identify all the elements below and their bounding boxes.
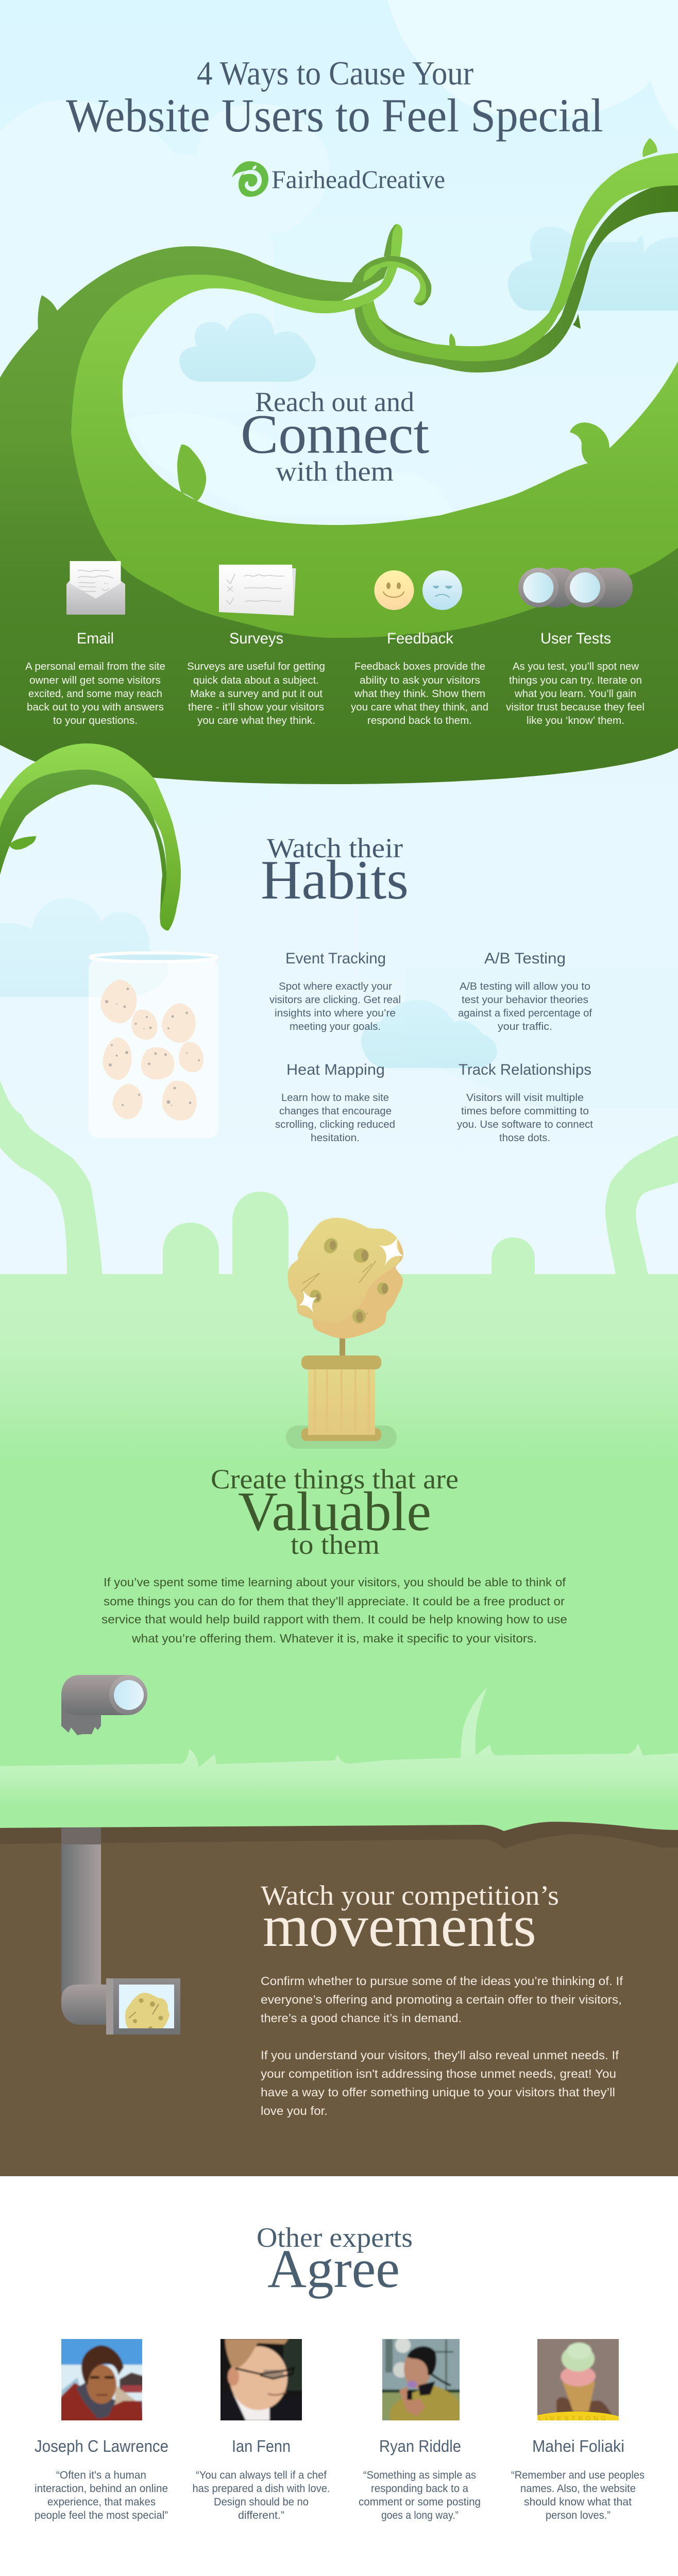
beanstalk: ring knot	[352, 256, 431, 306]
heading: Other experts Agree: Other experts	[257, 2222, 413, 2253]
description: you care what they think, and	[351, 701, 488, 713]
description: back out to you with answers	[27, 701, 164, 713]
description: things you can try. Iterate on	[509, 674, 642, 686]
text: Track Relationships: you. Use software to connect	[457, 1118, 593, 1130]
paragraph: create value: some things you can do for them that they’ll appreciate. It could be a free product or	[104, 1595, 565, 1608]
pale background clouds	[0, 0, 678, 1108]
description: to your questions.	[53, 715, 138, 726]
heading: Reach out and Connect with them: with them	[276, 456, 394, 487]
leaf: top of right stem	[642, 138, 657, 157]
expert: Joseph C Lawrence: “Often it's a human	[56, 2469, 146, 2481]
description: you care what they think.	[197, 715, 315, 726]
expert: Joseph C Lawrence: people feel the most special”	[35, 2510, 168, 2521]
text: A/B Testing: A/B testing will allow you to	[460, 980, 590, 992]
column: User Tests	[506, 568, 645, 726]
text: Heat Mapping: Heat Mapping	[286, 1061, 385, 1078]
column: Feedback	[351, 570, 488, 726]
label: Surveys	[229, 630, 283, 647]
expert: Ryan Riddle: comment or some posting	[359, 2496, 481, 2508]
icon: swirl	[232, 161, 268, 197]
pedestal shadow	[286, 1426, 397, 1449]
expert: Mahei Foliaki: “Remember and use peoples	[511, 2469, 645, 2481]
pedestal capital	[301, 1355, 381, 1369]
text: Event Tracking: visitors are clicking. Get real	[269, 994, 401, 1006]
heading: Create things that are Valuable to them	[211, 1464, 459, 1560]
description: excited, and some may reach	[28, 688, 162, 700]
heading: Reach out and Connect with them	[241, 386, 429, 487]
text: Heat Mapping: Learn how to make site	[281, 1092, 389, 1104]
expert: Mahei Foliaki: should know what that	[524, 2496, 632, 2508]
pedestal column	[308, 1369, 375, 1435]
heading: Watch their Habits: Habits	[261, 850, 409, 911]
expert: Ryan Riddle: responding back to a	[371, 2483, 468, 2495]
paragraphs: competition: Confirm whether to pursue some of the ideas you’re thinking of. If	[261, 1974, 623, 1988]
expert: Joseph C Lawrence: experience, that makes	[47, 2496, 156, 2508]
text: Event Tracking: Event Tracking	[285, 950, 386, 967]
panel: white experts section	[0, 2176, 678, 2576]
photo: Ryan Riddle	[382, 2339, 460, 2420]
potato chips	[308, 1236, 388, 1324]
sparkle large	[372, 1230, 411, 1272]
leaf	[9, 836, 36, 850]
text: Event Tracking: insights into where you’re	[275, 1007, 396, 1019]
leaf: inner left	[177, 445, 206, 501]
beanstalk: dark mass	[0, 246, 678, 784]
periscope above ground	[61, 1675, 147, 1735]
heading: Other experts Agree	[257, 2222, 413, 2299]
bean speckles	[105, 988, 200, 1106]
cloud: centre under the vine	[179, 313, 316, 382]
expert: Ryan Riddle: Ryan Riddle	[379, 2437, 461, 2455]
stem	[340, 1337, 345, 1357]
photo: Ian Fenn	[221, 2339, 302, 2420]
description: there - it’ll show your visitors	[188, 701, 324, 713]
cloud: behind the jar	[0, 898, 168, 997]
text: A/B Testing: against a fixed percentage of	[458, 1007, 592, 1019]
golden potato trophy	[286, 1218, 411, 1449]
text: Heat Mapping: changes that encourage	[279, 1105, 392, 1117]
expert: Ryan Riddle: goes a long way.”	[381, 2510, 459, 2521]
expert: Joseph C Lawrence: Joseph C Lawrence	[35, 2437, 168, 2455]
underground pipe and viewing frame	[61, 1827, 180, 2035]
paragraph: create value: what you’re offering them. Whatever it is, make it specific to your visitors.	[131, 1632, 537, 1645]
small potato on screen	[125, 1993, 170, 2028]
column: Surveys	[187, 565, 325, 726]
label: User Tests	[540, 630, 611, 647]
expert: Mahei Foliaki	[511, 2437, 645, 2521]
paragraphs: competition: have a way to offer something unique to your visitors that they’ll	[261, 2086, 615, 2099]
beanstalk: dark tip stripe	[384, 224, 398, 257]
description: what they think. Show them	[354, 688, 485, 700]
jar rim	[90, 953, 217, 961]
text: Track Relationships: Visitors will visit multiple	[466, 1092, 584, 1104]
description: respond back to them.	[367, 715, 472, 726]
paragraphs: competition: your competition isn't addressing those unmet needs, great! You	[261, 2067, 616, 2080]
cloud: right of the vine	[508, 227, 678, 311]
description: Feedback boxes provide the	[354, 660, 485, 672]
text: A/B Testing: A/B Testing	[484, 950, 566, 967]
leaf: on the lower curve	[449, 333, 455, 346]
text: Track Relationships: those dots.	[499, 1132, 550, 1144]
screen	[119, 1985, 174, 2028]
leaf: dark under the right stem	[573, 314, 581, 329]
heading: Other experts Agree: Agree	[267, 2239, 400, 2299]
column: Email	[25, 561, 165, 726]
sparkle small	[293, 1285, 323, 1317]
cloud: behind the Habits text	[361, 1000, 497, 1068]
paragraphs: competition: there’s a good chance it’s in demand.	[261, 2011, 462, 2025]
beanstalk: light mass	[71, 224, 678, 638]
icon: envelope	[66, 561, 125, 615]
description: As you test, you’ll spot new	[513, 660, 639, 672]
expert: Mahei Foliaki: names. Also, the website	[520, 2483, 636, 2495]
potato body	[288, 1218, 403, 1338]
description: Surveys are useful for getting	[187, 660, 325, 672]
title	[66, 55, 603, 142]
text: Track Relationships	[457, 1061, 593, 1144]
description: quick data about a subject.	[193, 674, 319, 686]
label: Email	[77, 630, 114, 647]
title: Website Users to Feel Special	[66, 89, 603, 142]
paragraphs: competition: love you for.	[261, 2104, 328, 2117]
description	[187, 660, 325, 726]
expert: Ian Fenn: “You can always tell if a chef	[196, 2469, 327, 2481]
text: Event Tracking: Spot where exactly your	[279, 980, 392, 992]
description: Make a survey and put it out	[190, 688, 323, 700]
glass jar with beans	[89, 953, 218, 1138]
icon: happy and sad faces	[374, 570, 462, 610]
paragraph: create value: service that would help build rapport with them. It could be help knowing how to use	[101, 1613, 567, 1626]
expert: Ryan Riddle: “Something as simple as	[363, 2469, 476, 2481]
heading: Watch your competition's movements: Watch your competition’s	[261, 1880, 559, 1911]
text: A/B Testing: test your behavior theories	[462, 994, 588, 1006]
heading: Create things that are Valuable to them: Valuable	[238, 1481, 431, 1543]
description	[506, 660, 645, 726]
text: Track Relationships: times before committing to	[461, 1105, 589, 1117]
expert: Ian Fenn	[193, 2437, 330, 2521]
expert: Joseph C Lawrence	[35, 2437, 168, 2521]
description: A personal email from the site	[25, 660, 165, 672]
expert: Ian Fenn: different.”	[238, 2510, 284, 2521]
description	[25, 660, 165, 726]
potato highlight	[288, 1218, 400, 1323]
text: Event Tracking: meeting your goals.	[290, 1021, 381, 1032]
heading: Create things that are Valuable to them: to them	[291, 1529, 380, 1560]
paragraphs: competition	[261, 1974, 623, 2117]
paragraph: create value	[101, 1575, 567, 1645]
label: Feedback	[387, 630, 454, 647]
photo: Mahei Foliaki	[537, 2339, 619, 2420]
pipe elbow	[61, 1985, 106, 2025]
photo: Joseph C Lawrence	[61, 2339, 142, 2420]
text: A/B Testing	[458, 950, 592, 1032]
expert: Ryan Riddle	[359, 2437, 481, 2521]
frame	[106, 1978, 180, 2035]
text: A/B Testing: your traffic.	[498, 1021, 552, 1032]
description: visitor trust because they feel	[506, 701, 645, 713]
pedestal base	[301, 1428, 381, 1441]
expert: Ian Fenn: Design should be no	[214, 2496, 309, 2508]
expert: Ian Fenn: has prepared a dish with love.	[193, 2483, 330, 2495]
description: owner will get some visitors	[29, 674, 161, 686]
heading: Reach out and Connect with them: Reach out and	[255, 386, 414, 417]
heading: Watch their Habits: Watch their	[267, 833, 403, 863]
title: 4 Ways to Cause Your	[197, 55, 473, 92]
icon: binoculars	[518, 568, 633, 607]
pipe section in dark soil	[61, 1827, 101, 1844]
vertical pipe	[61, 1844, 101, 1993]
logo: Fairhead Creative	[232, 161, 445, 197]
photo: Mahei Foliaki: LIVESTRONG	[539, 2415, 606, 2422]
heading: Watch your competition's movements: movements	[263, 1893, 536, 1959]
text: Heat Mapping: scrolling, clicking reduced	[275, 1118, 395, 1130]
grass strip	[0, 1687, 678, 1834]
paragraphs: competition: If you understand your visitors, they'll also reveal unmet needs. If	[261, 2048, 619, 2062]
sky background	[0, 0, 678, 1278]
heading: Reach out and Connect with them: Connect	[241, 404, 429, 465]
soil	[0, 1822, 678, 2176]
icon: survey sheets	[219, 565, 296, 616]
description: what you learn. You’ll gain	[514, 688, 636, 700]
jar body	[89, 958, 218, 1138]
wordmark: Creative	[362, 165, 445, 194]
description	[351, 660, 488, 726]
description: ability to ask your visitors	[360, 674, 480, 686]
expert: Mahei Foliaki: Mahei Foliaki	[532, 2437, 624, 2455]
expert: Ian Fenn: Ian Fenn	[232, 2437, 291, 2455]
hanging vine arch	[0, 743, 181, 930]
paragraph: create value: If you’ve spent some time learning about your visitors, you should be able to think of	[104, 1575, 566, 1589]
beans	[97, 977, 206, 1123]
text: Track Relationships: Track Relationships	[459, 1061, 591, 1078]
wordmark	[272, 165, 445, 194]
text: Heat Mapping	[275, 1061, 395, 1144]
background vine silhouettes	[0, 1080, 678, 1278]
potato scratches	[301, 1261, 376, 1316]
expert: Joseph C Lawrence: interaction, behind an online	[35, 2483, 168, 2495]
wordmark: Fairhead	[272, 165, 361, 194]
text: Event Tracking	[269, 950, 401, 1032]
expert: Mahei Foliaki: person loves.”	[546, 2510, 611, 2521]
paragraphs: competition: everyone’s offering and promoting a certain offer to their visitors,	[261, 1993, 622, 2006]
ground	[0, 1274, 678, 1836]
text: Heat Mapping: hesitation.	[311, 1132, 360, 1144]
description: like you ‘know’ them.	[527, 715, 624, 726]
beanstalk: second vine with loop	[354, 138, 678, 372]
heading: Create things that are Valuable to them: Create things that are	[211, 1464, 459, 1495]
